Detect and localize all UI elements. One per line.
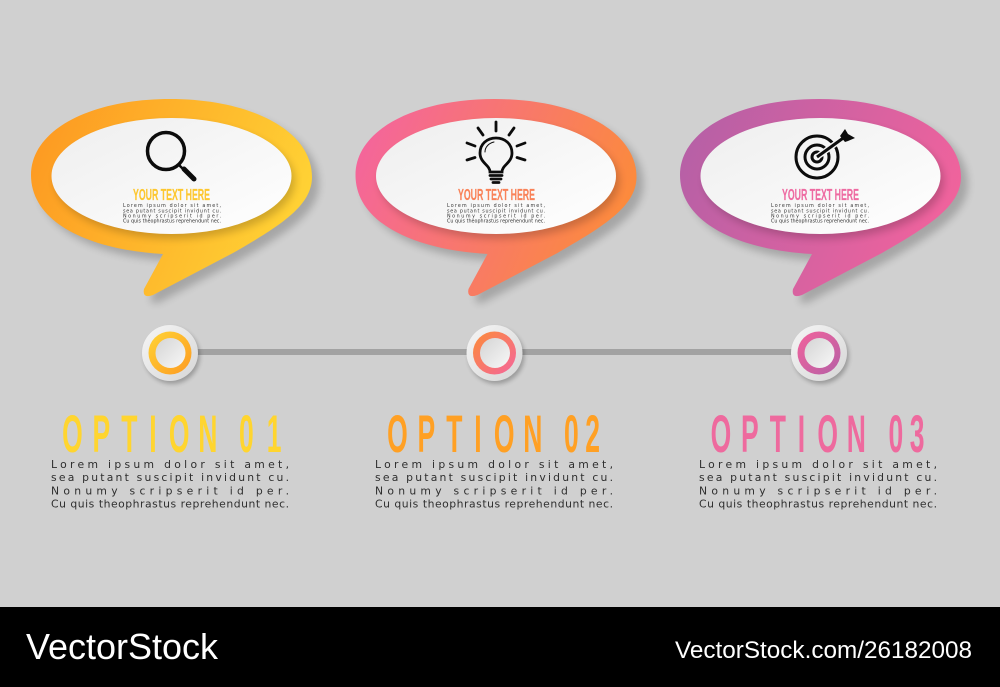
- heading: option 01: OPTION 01: [62, 404, 281, 463]
- text block: bubble 3 copy: sea putant suscipit invidunt cu.: [771, 208, 869, 214]
- footer logo text: VectorStock: [26, 626, 219, 667]
- heading: your text here 1: YOUR TEXT HERE: [133, 187, 210, 204]
- text block: bubble 1 copy: Lorem ipsum dolor sit amet,: [123, 203, 221, 209]
- timeline node 1: [142, 325, 200, 384]
- text block: option 01 copy: Lorem ipsum dolor sit amet,: [51, 458, 289, 471]
- footer image id text: VectorStock.com/26182008: [675, 637, 972, 664]
- text block: option 02 copy: [375, 458, 613, 510]
- panel: speech bubble 2: [356, 99, 644, 303]
- text block: option 03 copy: [699, 458, 937, 510]
- panel: speech bubble 1: [31, 99, 319, 303]
- text block: option 01 copy: [51, 458, 289, 510]
- timeline connector: [195, 349, 800, 355]
- text block: bubble 3 copy: Nonumy scripserit id per.: [771, 214, 869, 220]
- text block: option 03 copy: Lorem ipsum dolor sit amet,: [699, 458, 937, 471]
- text block: option 03 copy: Nonumy scripserit id per.: [699, 484, 937, 498]
- text block: option 02 copy: sea putant suscipit invidunt cu.: [375, 471, 613, 484]
- text block: bubble 3 copy: Cu quis theophrastus reprehendunt nec.: [771, 218, 869, 224]
- timeline node 3: [791, 325, 849, 384]
- panel: speech bubble 3: [680, 99, 968, 303]
- text block: option 02 copy: Nonumy scripserit id per.: [375, 484, 613, 498]
- text block: option 02 copy: Cu quis theophrastus reprehendunt nec.: [375, 498, 613, 510]
- text block: option 03 copy: sea putant suscipit invidunt cu.: [699, 471, 937, 484]
- timeline node 2: [466, 325, 524, 384]
- text block: bubble 3 copy: Lorem ipsum dolor sit amet,: [771, 203, 869, 209]
- heading: your text here 3: YOUR TEXT HERE: [782, 187, 859, 204]
- heading: option 02: OPTION 02: [387, 404, 600, 463]
- text block: bubble 1 copy: sea putant suscipit invidunt cu.: [123, 208, 221, 214]
- heading: your text here 2: YOUR TEXT HERE: [458, 187, 535, 204]
- text block: bubble 1 copy: [123, 203, 221, 224]
- icon: target with arrow: [796, 129, 855, 178]
- text block: option 03 copy: Cu quis theophrastus reprehendunt nec.: [699, 498, 937, 510]
- icon: magnifying glass: [148, 132, 194, 179]
- text block: option 02 copy: Lorem ipsum dolor sit amet,: [375, 458, 613, 471]
- text block: option 01 copy: Nonumy scripserit id per.: [51, 484, 289, 498]
- icon: light bulb: [467, 122, 525, 182]
- text block: bubble 2 copy: sea putant suscipit invidunt cu.: [447, 208, 545, 214]
- text block: bubble 1 copy: Nonumy scripserit id per.: [123, 214, 221, 220]
- text block: bubble 2 copy: Lorem ipsum dolor sit amet,: [447, 203, 545, 209]
- text block: option 01 copy: sea putant suscipit invidunt cu.: [51, 471, 289, 484]
- footer bar: [0, 607, 1000, 687]
- text block: bubble 1 copy: Cu quis theophrastus reprehendunt nec.: [123, 218, 221, 224]
- text block: option 01 copy: Cu quis theophrastus reprehendunt nec.: [51, 498, 289, 510]
- text block: bubble 3 copy: [771, 203, 869, 224]
- text block: bubble 2 copy: [447, 203, 545, 224]
- heading: option 03: OPTION 03: [711, 404, 924, 463]
- text block: bubble 2 copy: Cu quis theophrastus reprehendunt nec.: [447, 218, 545, 224]
- text block: bubble 2 copy: Nonumy scripserit id per.: [447, 214, 545, 220]
